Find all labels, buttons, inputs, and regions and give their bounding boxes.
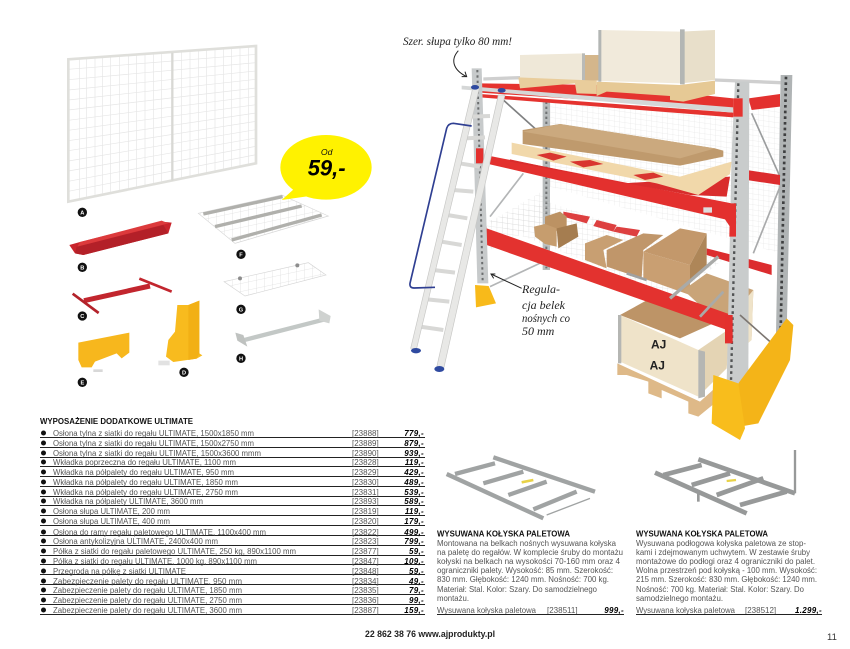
price bubble: Od <box>321 147 334 157</box>
table: accessories price list: [23835] <box>352 586 379 595</box>
marker H <box>236 354 246 363</box>
table: accessories price list: [23819] <box>352 507 379 516</box>
table: accessories price list: Zabezpieczenie palety do regału ULTIMATE, 2750 mm <box>53 596 242 605</box>
table: accessories price list <box>40 429 425 615</box>
panel: accessories photos <box>68 43 372 387</box>
table: accessories price list: Zabezpieczenie palety do regału ULTIMATE, 1850 mm <box>53 586 242 595</box>
product image: pull-out pallet cradle <box>447 457 595 518</box>
rear crate under shelf <box>683 273 753 353</box>
table: accessories price list: 79,- <box>409 586 424 595</box>
marker D: D <box>182 370 186 376</box>
right column guard <box>712 318 793 440</box>
text block: floor cradle: 215 mm. Szerokość: 830 mm. Głębokość: 1240 mm. <box>636 575 817 584</box>
text block: floor cradle: samodzielnego montażu. <box>636 594 723 603</box>
table: accessories price list: 499,- <box>403 528 424 537</box>
text block: pull-out cradle: 830 mm. Głębokość: 1240 mm. Nośność: 700 kg. <box>437 575 609 584</box>
product A: mesh back panel <box>68 43 256 203</box>
table: accessories price list: [23836] <box>352 596 379 605</box>
small crate on top shelf <box>518 53 599 94</box>
table: accessories price list: 59,- <box>409 547 424 556</box>
table: accessories price list: Osłona słupa ULTIMATE, 400 mm <box>53 517 170 526</box>
marker G: G <box>239 307 244 313</box>
table: accessories price list: 119,- <box>405 507 424 516</box>
marker F <box>236 250 246 259</box>
text block: pull-out cradle: ograniczniki palety. Wysokość: 85 mm. Szerokość: <box>437 566 613 575</box>
table: accessories price list: Osłona tylna z siatki do regału ULTIMATE, 1500x1850 mm <box>53 429 254 438</box>
table: accessories price list: Półka z siatki do regału ULTIMATE, 1000 kg, 890x1100 mm <box>53 557 257 566</box>
note: beam adjustment: cja belek <box>522 298 566 312</box>
marker F: F <box>239 252 243 258</box>
table: accessories price list: [23889] <box>352 439 379 448</box>
lower shelf beam <box>479 224 732 332</box>
table: accessories price list: Wkładka na półpalety do regału ULTIMATE, 1850 mm <box>53 478 238 487</box>
table: accessories price list: [23829] <box>352 468 379 477</box>
rear beams <box>483 76 781 275</box>
table: accessories price list: Półka z siatki do regału paletowego ULTIMATE, 250 kg, 890x1100 mm <box>53 547 296 556</box>
product E: yellow frame guard <box>78 333 129 372</box>
table: accessories price list: [23893] <box>352 497 379 506</box>
table: accessories price list: Osłona antykolizyjna ULTIMATE, 2400x400 mm <box>53 537 218 546</box>
note: beam adjustment: 50 mm <box>522 324 555 338</box>
table: accessories price list: [23830] <box>352 478 379 487</box>
table: accessories price list: 779,- <box>404 429 424 438</box>
table: accessories price list: [23834] <box>352 577 379 586</box>
text block: floor cradle: kami i zdejmowanym uchwytem. W zestawie śruby <box>636 548 810 557</box>
rack rear uprights <box>490 75 792 333</box>
front crate with pallet: AJ <box>651 337 666 351</box>
marker C: C <box>80 314 84 320</box>
middle shelf pallet with boards <box>512 124 732 195</box>
table: accessories price list: [23823] <box>352 537 379 546</box>
product image: floor pallet cradle <box>655 450 795 513</box>
table: accessories price list: Wkładka poprzeczna do regału ULTIMATE, 1100 mm <box>53 458 236 467</box>
text block: pull-out cradle: Materiał: Stal. Kolor: Szary. Do samodzielnego <box>437 585 598 594</box>
front crate with pallet <box>617 297 730 417</box>
panel: pallet rack photo <box>410 29 793 440</box>
text block: floor cradle <box>636 530 822 615</box>
product G: mesh shelf <box>224 263 326 296</box>
marker B: B <box>80 265 84 271</box>
ladder with blue handrail <box>410 85 506 372</box>
table: accessories price list: 99,- <box>409 596 424 605</box>
table: accessories price list: Wkładka na półpalety do regału ULTIMATE, 950 mm <box>53 468 234 477</box>
marker A <box>78 208 87 217</box>
table: accessories price list: 489,- <box>403 478 424 487</box>
text block: pull-out cradle: Montowana na belkach nośnych wysuwana kołyska <box>437 539 617 548</box>
text block: pull-out cradle: kołyski na belkach na wysokości 70-160 mm oraz 4 <box>437 557 621 566</box>
product B: red cross beam <box>69 221 172 255</box>
marker A: A <box>80 210 84 216</box>
table: accessories price list: 109,- <box>404 557 424 566</box>
table: accessories price list: Zabezpieczenie palety do regału ULTIMATE, 950 mm <box>53 577 242 586</box>
heading: floor cradle: WYSUWANA KOŁYSKA PALETOWA <box>636 530 768 538</box>
note: beam adjustment: nośnych co <box>522 311 570 325</box>
table: accessories price list: [23890] <box>352 449 379 458</box>
small cartons <box>534 212 578 248</box>
text block: pull-out cradle: Wysuwana kołyska paletowa <box>437 606 537 615</box>
table: accessories price list: Wkładka na półpalety ULTIMATE, 3600 mm <box>53 497 203 506</box>
table: accessories price list: Przegroda na półkę z siatki ULTIMATE <box>53 567 186 576</box>
text block: floor cradle: Wolna przestrzeń pod kołyską - 100 mm. Wysokość: <box>636 566 817 575</box>
note arrow: beam adjustment <box>491 274 522 288</box>
table: accessories price list: [23847] <box>352 557 379 566</box>
large crate on top shelf <box>597 29 715 102</box>
price bubble <box>280 135 372 200</box>
product C: red half pallet insert <box>73 279 172 313</box>
table: accessories price list: Osłona tylna z siatki do regału ULTIMATE, 1500x3600 mmm <box>53 449 261 458</box>
lower shelf wire deck <box>487 202 723 297</box>
text block: floor cradle: montażowe do podłogi oraz 4 ograniczniki do palet. <box>636 557 815 566</box>
table: accessories price list: [23822] <box>352 528 379 537</box>
table: accessories price list: [23828] <box>352 458 379 467</box>
product H: silver pallet stop <box>235 309 331 347</box>
page number: 11 <box>827 632 837 643</box>
footer contact: 22 862 38 76 www.ajprodukty.pl <box>365 629 495 639</box>
text block: floor cradle: Wysuwana kołyska paletowa <box>636 606 736 615</box>
front uprights <box>472 68 770 383</box>
text block: floor cradle: Wysuwana podłogowa kołyska paletowa ze stop- <box>636 539 806 548</box>
table: accessories price list: [23888] <box>352 429 379 438</box>
middle shelf beam <box>490 156 737 237</box>
rack rear mesh <box>487 103 780 253</box>
table: accessories price list: [23877] <box>352 547 379 556</box>
table: accessories price list: Osłona słupa ULTIMATE, 200 mm <box>53 507 170 516</box>
text block: pull-out cradle: [238511] <box>547 606 578 615</box>
table: accessories price list: [23848] <box>352 567 379 576</box>
table: accessories price list: 119,- <box>405 458 424 467</box>
marker B <box>78 263 87 272</box>
marker C <box>78 311 87 321</box>
text block: pull-out cradle <box>437 530 624 615</box>
table: accessories price list: 59,- <box>409 567 424 576</box>
note arrow: column width <box>454 51 467 77</box>
text block: pull-out cradle: na paletę do regałów. W komplecie śruby do montażu <box>437 548 623 557</box>
left column guard <box>475 285 496 307</box>
table heading: WYPOSAŻENIE DODATKOWE ULTIMATE <box>40 417 194 426</box>
text block: floor cradle: Nośność: 700 kg. Materiał: Stal. Kolor: Szary. Do <box>636 585 805 594</box>
marker D <box>179 368 189 377</box>
text block: pull-out cradle: montażu. <box>437 594 469 603</box>
table: accessories price list: 939,- <box>404 449 424 458</box>
marker E <box>78 378 87 387</box>
marker H: H <box>239 356 243 362</box>
table: accessories price list: 159,- <box>404 606 424 615</box>
note: column width: Szer. słupa tylko 80 mm! <box>403 34 512 48</box>
large cartons <box>585 228 707 295</box>
note: beam adjustment: Regula- <box>521 282 560 296</box>
product F: wire shelf with rails <box>198 195 328 243</box>
table: accessories price list: Osłona tylna z siatki do regału ULTIMATE, 1500x2750 mm <box>53 439 254 448</box>
table: accessories price list: 879,- <box>404 439 424 448</box>
table: accessories price list: Wkładka na półpalety do regału ULTIMATE, 2750 mm <box>53 488 238 497</box>
product D: yellow column guard <box>158 301 202 365</box>
text block: floor cradle: [238512] <box>745 606 776 615</box>
table: accessories price list: 589,- <box>404 497 424 506</box>
marker E: E <box>80 380 84 386</box>
text block: pull-out cradle: 999,- <box>604 606 624 615</box>
table: accessories price list: [23887] <box>352 606 379 615</box>
table: accessories price list: 179,- <box>404 517 424 526</box>
note: beam adjustment <box>521 282 570 338</box>
table: accessories price list: 799,- <box>404 537 424 546</box>
table: accessories price list: Osłona do ramy regału paletowego ULTIMATE, 1100x400 mm <box>53 528 266 537</box>
text block: floor cradle: 1.299,- <box>795 606 822 615</box>
price bubble: 59,- <box>308 156 346 181</box>
front crate with pallet: AJ <box>650 358 665 372</box>
table: accessories price list: [23831] <box>352 488 379 497</box>
table: accessories price list: [23820] <box>352 517 379 526</box>
table: accessories price list: Zabezpieczenie palety do regału ULTIMATE, 3600 mm <box>53 606 242 615</box>
heading: pull-out cradle: WYSUWANA KOŁYSKA PALETOWA <box>437 530 570 538</box>
table: accessories price list: 429,- <box>403 468 424 477</box>
table: accessories price list: 539,- <box>404 488 424 497</box>
marker G <box>236 305 246 314</box>
table: accessories price list: 49,- <box>408 577 424 586</box>
top shelf deck <box>462 83 733 117</box>
